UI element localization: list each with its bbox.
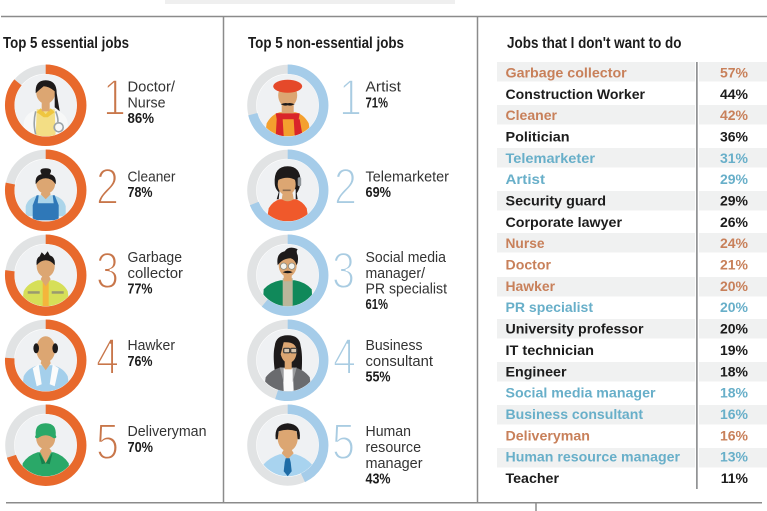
rank number 5: 5	[332, 413, 355, 470]
label: social media manager / PR specialist: manager/	[366, 265, 426, 282]
label: hawker: 76%	[128, 354, 153, 370]
table: percentages: 20%	[720, 278, 749, 294]
label: doctor/nurse: 86%	[128, 111, 154, 127]
table: percentages: 21%	[720, 257, 749, 273]
heading: jobs that I don't want to do: Jobs that I don't want to do	[507, 35, 682, 52]
label: garbage collector: Garbage	[128, 249, 182, 266]
item: telemarketer 69%	[252, 154, 449, 226]
item: doctor or nurse 86%	[10, 69, 176, 141]
label: telemarketer: Telemarketer	[366, 168, 449, 186]
label: hawker	[128, 337, 175, 370]
item: cleaner 78%	[10, 154, 176, 226]
label: human resource manager: 43%	[366, 472, 391, 488]
table: percentages: 20%	[720, 321, 749, 337]
label: doctor/nurse	[128, 78, 176, 127]
table: percentages: 18%	[720, 385, 749, 401]
ring and icon: human resource manager	[252, 409, 324, 481]
table: percentages: 20%	[720, 299, 749, 315]
label: social media manager / PR specialist: Social media	[366, 249, 447, 266]
table: percentages: 11%	[721, 470, 749, 486]
item: deliveryman 70%	[10, 409, 207, 481]
label: business consultant: Business	[366, 337, 422, 354]
ring and icon: artist	[252, 69, 324, 141]
ring and icon: hawker	[10, 324, 82, 396]
table: percentages: 16%	[720, 406, 749, 422]
label: artist	[366, 78, 402, 112]
item: hawker 76%	[10, 324, 175, 396]
table: percentages: 24%	[720, 235, 749, 251]
table: percentages: 44%	[720, 86, 749, 102]
ring and icon: doctor	[10, 69, 82, 141]
rank number 1: 1	[339, 69, 362, 126]
table: job names: Cleaner	[506, 107, 558, 123]
item: artist 71%	[252, 69, 402, 141]
ring and icon: cleaner	[10, 154, 82, 226]
ring and icon: telemarketer	[252, 154, 324, 226]
rank number 5: 5	[96, 413, 119, 470]
label: artist: Artist	[366, 78, 402, 96]
table: job names: Nurse	[506, 235, 545, 251]
label: garbage collector	[128, 249, 183, 298]
table: job names: Artist	[506, 171, 545, 187]
table: job names: Corporate lawyer	[506, 214, 623, 230]
table: job names	[506, 64, 681, 486]
table: percentages: 42%	[720, 107, 749, 123]
label: human resource manager: resource	[366, 439, 421, 456]
label: human resource manager: Human	[366, 423, 411, 440]
item: garbage collector 77%	[10, 239, 183, 311]
rank number 3: 3	[96, 242, 119, 299]
label: cleaner	[128, 168, 176, 201]
table: job names: Construction Worker	[506, 86, 646, 102]
ring and icon: garbage collector	[10, 239, 82, 311]
table: job names: Human resource manager	[506, 449, 681, 465]
table: job names: Deliveryman	[506, 427, 590, 443]
label: business consultant: consultant	[366, 353, 434, 370]
table: percentages: 16%	[720, 427, 749, 443]
item: business consultant 55%	[252, 324, 434, 396]
label: social media manager / PR specialist: 61%	[366, 297, 388, 313]
table: job names: Telemarketer	[506, 150, 596, 166]
item: social media manager or PR specialist 61%	[252, 239, 448, 313]
ring and icon: business consultant	[252, 324, 324, 396]
ring and icon: social media manager	[252, 239, 324, 311]
ring and icon: deliveryman	[10, 409, 82, 481]
panel: jobs that I don't want to do	[497, 35, 767, 489]
label: doctor/nurse: Nurse	[128, 94, 166, 112]
table: percentages: 31%	[720, 150, 749, 166]
table: job names: Politician	[506, 128, 570, 144]
table: job names: Teacher	[506, 470, 560, 486]
label: human resource manager	[366, 423, 423, 488]
table: job names: Garbage collector	[506, 64, 627, 80]
label: social media manager / PR specialist: PR specialist	[366, 280, 448, 298]
table: percentages: 29%	[720, 171, 749, 187]
table: job names: University professor	[506, 321, 644, 337]
label: garbage collector: 77%	[128, 282, 153, 298]
label: cleaner: Cleaner	[128, 168, 176, 186]
table: percentages: 13%	[720, 449, 749, 465]
rank number 4: 4	[96, 328, 119, 385]
table: job names: Social media manager	[506, 385, 656, 401]
table: percentages: 19%	[720, 342, 749, 358]
table: percentages	[720, 64, 749, 486]
label: deliveryman: Deliveryman	[128, 423, 206, 440]
label: deliveryman	[128, 423, 206, 456]
rank number 4: 4	[333, 328, 356, 385]
table: job names: Hawker	[506, 278, 556, 294]
rank number 3: 3	[332, 242, 355, 299]
panel: top 5 essential jobs	[3, 35, 206, 481]
label: cleaner: 78%	[128, 185, 153, 201]
table: percentages: 29%	[720, 192, 749, 208]
rank number 2: 2	[334, 158, 357, 215]
table: job names: IT technician	[506, 342, 594, 358]
label: hawker: Hawker	[128, 337, 175, 354]
table: job names: Engineer	[506, 363, 567, 379]
table: job names: PR specialist	[506, 299, 593, 315]
label: deliveryman: 70%	[128, 440, 153, 456]
label: business consultant	[366, 337, 434, 386]
label: doctor/nurse: Doctor/	[128, 78, 176, 96]
heading: top 5 essential jobs: Top 5 essential jobs	[3, 35, 129, 52]
rank number 2: 2	[96, 158, 119, 215]
label: social media manager / PR specialist	[366, 249, 448, 313]
table: job names: Doctor	[506, 257, 552, 273]
table: job names: Business consultant	[506, 406, 643, 422]
panel: top 5 non-essential jobs	[248, 35, 449, 488]
table: percentages: 57%	[720, 64, 749, 80]
label: artist: 71%	[366, 96, 388, 112]
label: telemarketer	[366, 168, 449, 201]
label: business consultant: 55%	[366, 370, 391, 386]
table: percentages: 18%	[720, 363, 749, 379]
label: human resource manager: manager	[366, 455, 423, 472]
rank number 1: 1	[103, 69, 126, 126]
table: job names: Security guard	[506, 192, 606, 208]
label: telemarketer: 69%	[366, 185, 391, 201]
item: human resource manager 43%	[252, 409, 423, 488]
heading: top 5 non-essential jobs: Top 5 non-essential jobs	[248, 35, 404, 52]
table: percentages: 36%	[720, 128, 749, 144]
table: percentages: 26%	[720, 214, 749, 230]
label: garbage collector: collector	[128, 265, 183, 282]
